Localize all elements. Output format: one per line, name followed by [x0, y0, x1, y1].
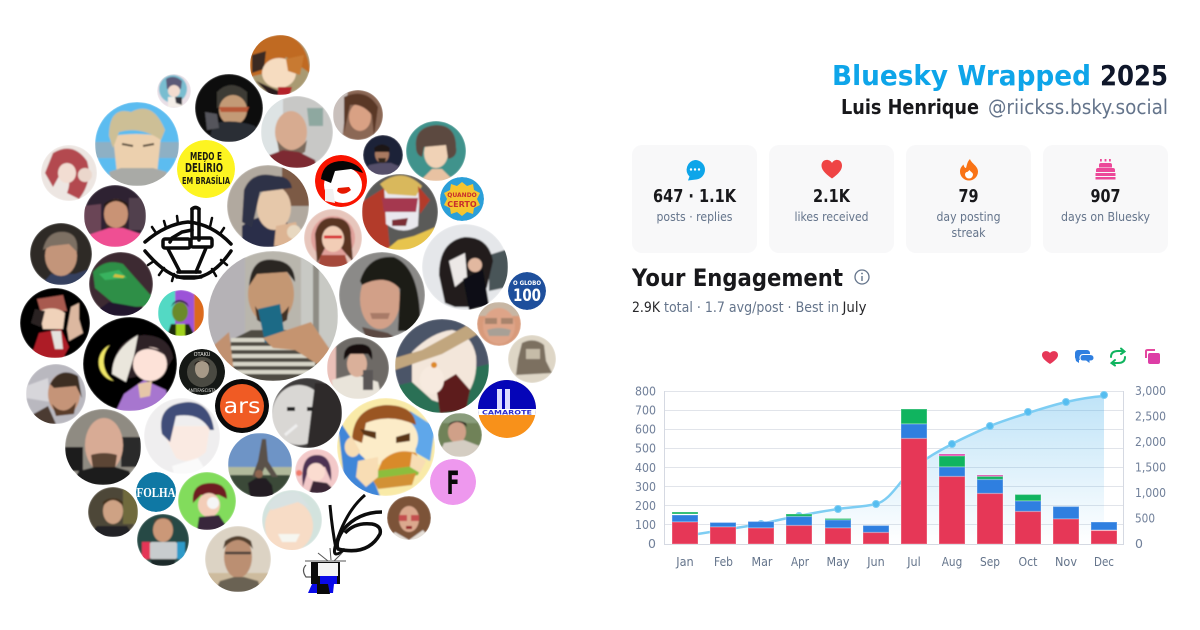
- right axis labels: 2,500: [1135, 408, 1166, 424]
- avatar: Camarote da Republica logo: CAMAROTE: [482, 410, 532, 416]
- avatar: small anime on blue: [157, 74, 191, 108]
- month labels: Jul: [906, 554, 921, 569]
- stat card: posts and replies: [632, 145, 757, 253]
- avatar: Medo e Delirio logo: EM BRASÍLIA: [182, 174, 230, 187]
- stat card: streak: day posting: [936, 209, 1000, 224]
- avatar: main selfie: [208, 251, 338, 381]
- user name and handle: @riickss.bsky.social: [988, 95, 1168, 119]
- title: Bluesky Wrapped: [832, 59, 1091, 92]
- avatar: man in dark room: [363, 135, 403, 175]
- bar: Jun: [863, 526, 889, 544]
- avatar: VB brush logo: [330, 495, 382, 554]
- avatar: yellow burst logo: CERTO: [447, 200, 477, 209]
- avatar: TV head cartoon: [304, 548, 346, 594]
- avatar: long black hair woman: [422, 224, 508, 310]
- avatar: Camarote da Republica logo: [478, 380, 536, 438]
- avatar: yellow burst logo: QUANDO: [447, 192, 477, 199]
- left axis labels: 500: [635, 440, 656, 456]
- avatar: O Globo 100: 100: [513, 286, 541, 306]
- stat card: streak: [906, 145, 1031, 253]
- avatar: anime man with glasses and cap: [227, 165, 309, 247]
- chart legend: [1042, 348, 1160, 366]
- icon: likes legend: [1042, 351, 1058, 364]
- avatar: man with long black hair: [339, 252, 425, 338]
- engagement summary: July: [842, 300, 866, 316]
- avatar cluster: [20, 35, 556, 594]
- stat card: likes: 2.1K: [813, 186, 851, 207]
- avatar: woman with red glasses: [387, 496, 431, 540]
- right axis labels: 1,500: [1135, 460, 1166, 474]
- stacked bars: [672, 409, 1117, 544]
- avatar: man holding phone: [327, 337, 389, 399]
- avatar: anime on green: [178, 472, 236, 530]
- avatar: Medo e Delirio logo: MEDO E: [190, 150, 222, 163]
- avatar: raised finger eye logo: [144, 204, 232, 292]
- avatar: man with orange glasses: [195, 74, 263, 142]
- avatar: anime girl with purple hair: [295, 449, 339, 493]
- avatar: Folha logo: FOLHA: [136, 486, 176, 501]
- avatar: smiling anime: [262, 490, 322, 552]
- month labels: Oct: [1018, 554, 1038, 569]
- avatar: teal anime: [406, 121, 466, 181]
- avatar: bald man with beard: [261, 96, 333, 168]
- right axis labels: 1,000: [1135, 485, 1166, 500]
- avatar: anime white shirt: [144, 398, 220, 474]
- icon: flame: [960, 159, 978, 180]
- stat card: days on Bluesky: [1043, 145, 1168, 253]
- avatar: F logo on pink: [430, 459, 476, 505]
- icon: quotes legend: [1146, 350, 1160, 364]
- left axis labels: 700: [635, 402, 656, 418]
- avatar: Chun-Li eating a burger: [337, 398, 435, 496]
- left axis labels: 100: [635, 517, 656, 532]
- avatar: O Globo 100: O GLOBO: [513, 280, 541, 287]
- icon: info: [855, 270, 869, 284]
- bar: Nov: [1053, 506, 1079, 544]
- left axis labels: [635, 384, 656, 551]
- stat card: days on Bluesky: 907: [1090, 186, 1120, 207]
- avatar: orange-haired anime: [250, 35, 310, 95]
- month labels: [675, 554, 1114, 569]
- engagement summary: 2.9K: [632, 300, 661, 316]
- bar: Jul: [901, 409, 927, 544]
- right axis labels: [1135, 383, 1166, 551]
- avatar: red cartoon: [315, 155, 367, 207]
- month labels: Mar: [752, 554, 773, 569]
- avatar: man with glasses in dark shirt: [88, 487, 138, 537]
- icon: chat bubble: [687, 160, 705, 180]
- avatar: anime girl with crescent moon: [83, 317, 177, 411]
- title: 2025: [1100, 59, 1168, 92]
- right axis labels: 3,000: [1135, 383, 1166, 398]
- avatar: yellow burst logo: [440, 177, 484, 221]
- avatar: anime kid in cap on black: [20, 288, 90, 358]
- month labels: Nov: [1055, 554, 1078, 569]
- avatar: Medo e Delirio logo: DELÍRIO: [185, 160, 223, 175]
- avatar: Folha logo: [136, 472, 176, 512]
- avatar: Eiffel tower: [228, 433, 292, 497]
- icon: heart: [822, 160, 842, 178]
- right axis labels: 0: [1135, 536, 1143, 551]
- avatar: man with glasses outdoors: [438, 413, 482, 457]
- stat card: posts and replies: posts · replies: [656, 209, 732, 224]
- bar: Feb: [710, 522, 736, 544]
- user name and handle: Luis Henrique: [841, 95, 979, 119]
- icon: reposts legend: [1111, 348, 1125, 366]
- left axis labels: 0: [648, 536, 656, 551]
- icon: cake: [1096, 159, 1116, 180]
- avatar: F logo on pink: F: [446, 464, 460, 502]
- month labels: Jun: [866, 554, 885, 569]
- month labels: Feb: [714, 554, 733, 569]
- avatar: masked comic hero: [362, 174, 438, 250]
- avatar: Ars Technica logo: [215, 379, 269, 433]
- avatar: Medo e Delirio logo: [177, 140, 235, 198]
- avatar: man with grey hair: [30, 223, 92, 285]
- bar: Jan: [672, 512, 698, 544]
- avatar: bald man with mustache: [65, 409, 141, 485]
- left axis labels: 800: [635, 384, 656, 398]
- avatar: man in pink shirt: [84, 185, 146, 247]
- bar: Oct: [1015, 494, 1041, 544]
- avatar: green dragon: [89, 252, 153, 316]
- stat card: streak: streak: [952, 225, 986, 240]
- avatar: blond man on blue: [95, 102, 179, 186]
- cumulative line: [685, 396, 1104, 536]
- cumulative area: [685, 396, 1104, 544]
- stat card: likes: likes received: [794, 209, 868, 224]
- bar: Apr: [786, 514, 812, 544]
- month labels: Jan: [675, 554, 694, 569]
- right axis labels: 500: [1135, 510, 1155, 526]
- avatar: red-haired anime: [41, 145, 97, 201]
- right axis labels: 2,000: [1135, 434, 1166, 449]
- avatar: woman with brown hair: [333, 90, 383, 140]
- engagement summary: total · 1.7 avg/post · Best in: [664, 300, 839, 316]
- stat card: streak: 79: [958, 186, 978, 207]
- month labels: Sep: [980, 554, 1000, 569]
- avatar: statue sketch: [508, 335, 556, 383]
- avatar: Ars Technica logo: ars: [224, 394, 260, 418]
- bar: May: [825, 518, 851, 544]
- left axis labels: 600: [635, 422, 656, 436]
- avatar: older man with glasses: [477, 302, 521, 346]
- combined bar and line chart: [635, 383, 1166, 569]
- avatar: baby with cigarette: [272, 378, 342, 448]
- avatar: cat and bearded man: [26, 364, 86, 424]
- month labels: Dec: [1094, 554, 1114, 569]
- icon: replies legend: [1075, 350, 1094, 364]
- bar: Mar: [748, 522, 774, 544]
- avatar: man on colorful background: [158, 290, 204, 336]
- avatar: curly hair girl with red glasses: [304, 209, 362, 267]
- stat card: posts and replies: 647 · 1.1K: [653, 186, 737, 207]
- bar: Sep: [977, 475, 1003, 544]
- month labels: Aug: [942, 554, 962, 569]
- avatar: Otaku Antifascista logo: ANTIFASCISTA: [188, 388, 216, 393]
- stat card: days on Bluesky: days on Bluesky: [1061, 209, 1151, 224]
- heading: Your Engagement: Your Engagement: [631, 264, 843, 292]
- stat card: likes: [769, 145, 894, 253]
- left axis labels: 300: [635, 479, 656, 494]
- bar: Dec: [1091, 522, 1117, 544]
- avatar: man holding Switch: [137, 514, 189, 566]
- avatar: man with glasses neutral wall: [205, 526, 271, 592]
- avatar: O Globo 100: [508, 272, 546, 310]
- user name and handle: [841, 95, 1168, 119]
- month labels: Apr: [791, 554, 810, 569]
- avatar: white anime with hat: [395, 319, 489, 413]
- left axis labels: 200: [635, 498, 656, 513]
- grid: [664, 391, 1124, 544]
- bar: Aug: [939, 454, 965, 544]
- month labels: May: [826, 554, 850, 569]
- left axis labels: 400: [635, 460, 656, 475]
- line points: [720, 392, 1108, 534]
- avatar: Otaku Antifascista logo: [179, 349, 225, 395]
- avatar: Otaku Antifascista logo: OTAKU: [194, 352, 211, 358]
